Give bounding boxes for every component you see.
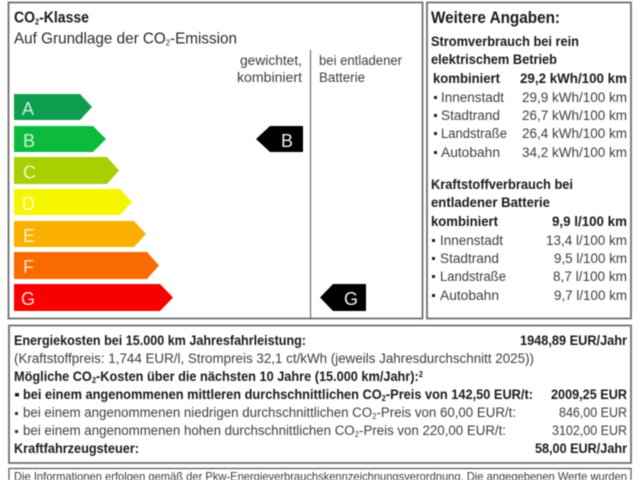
- subheading: 2: [166, 38, 171, 48]
- panel: costs: [9, 326, 631, 463]
- electricity consumption: Landstraße: [441, 126, 507, 141]
- column label: discharged battery: Batterie: [319, 70, 365, 85]
- energy costs: Energiekosten bei 15.000 km Jahresfahrleistung:: [14, 333, 306, 348]
- electricity consumption: Stromverbrauch bei rein: [431, 34, 579, 49]
- electricity consumption: Innenstadt: [441, 90, 504, 105]
- fuel consumption: [431, 177, 627, 303]
- bar D: [14, 189, 132, 215]
- panel: further details: [427, 2, 631, 318]
- possible CO2 costs heading: Mögliche CO: [14, 369, 96, 384]
- fuel consumption: Kraftstoffverbrauch bei: [431, 177, 573, 192]
- electricity consumption: 29,9 kWh/100 km: [522, 90, 627, 105]
- column label: discharged battery: bei entladener: [319, 53, 403, 68]
- vehicle tax: 58,00 EUR/Jahr: [535, 441, 628, 456]
- medium price: [15, 387, 627, 403]
- bar B: B: [23, 131, 35, 151]
- column label: weighted combined: kombiniert: [237, 70, 302, 85]
- fuel consumption: Landstraße: [440, 269, 506, 284]
- possible CO2 costs heading: -Kosten über die nächsten 10 Jahre (15.000 km/Jahr):: [96, 369, 419, 384]
- marker: discharged class G: G: [344, 289, 358, 309]
- bar B: [14, 126, 106, 152]
- low price: -Preis von 60,00 EUR/t:: [377, 405, 516, 420]
- electricity consumption: 34,2 kWh/100 km: [522, 145, 627, 160]
- bar E: [14, 221, 146, 247]
- high price: 2: [355, 430, 360, 439]
- electricity consumption: Autobahn: [441, 145, 500, 160]
- medium price: 2009,25 EUR: [551, 387, 627, 402]
- heading: CO2-Klasse: -Klasse: [39, 10, 89, 26]
- fuel consumption: Stadtrand: [440, 251, 499, 266]
- electricity consumption: elektrischem Betrieb: [431, 52, 557, 67]
- high price: -Preis von 220,00 EUR/t:: [359, 423, 506, 438]
- electricity consumption: kombiniert: [433, 71, 501, 86]
- possible CO2 costs heading: 2: [92, 376, 97, 385]
- electricity consumption: Stadtrand: [441, 108, 500, 123]
- high price: [15, 423, 627, 439]
- energy costs: 1948,89 EUR/Jahr: [520, 333, 628, 348]
- high price: bei einem angenommenen hohen durchschnittlichen CO: [23, 423, 357, 438]
- bar C: [14, 157, 119, 184]
- possible CO2 costs heading: 2: [419, 370, 424, 379]
- low price: bei einem angenommenen niedrigen durchschnittlichen CO: [23, 405, 375, 420]
- marker: weighted class B: B: [281, 131, 293, 151]
- bar C: C: [23, 162, 36, 182]
- bar F: F: [23, 257, 34, 277]
- low price: 2: [372, 412, 377, 421]
- heading: further details: Weitere Angaben:: [431, 9, 560, 27]
- vehicle tax: [14, 441, 628, 456]
- fuel consumption: Innenstadt: [440, 233, 503, 248]
- fuel consumption: 8,7 l/100 km: [553, 269, 627, 284]
- bar A: [14, 94, 92, 120]
- fuel consumption: 9,7 l/100 km: [554, 288, 627, 303]
- fuel and electricity prices: (Kraftstoffpreis: 1,744 EUR/l, Strompreis 32,1 ct/kWh (jeweils Jahresdurchschnitt 2025)): [14, 351, 534, 366]
- subheading: -Emission: [170, 30, 237, 48]
- marker: discharged class G: [320, 284, 366, 311]
- column label: weighted combined: gewichtet,: [240, 53, 302, 68]
- fuel consumption: 9,9 l/100 km: [552, 214, 627, 229]
- fuel consumption: kombiniert: [431, 214, 499, 229]
- medium price: -Preis von 142,50 EUR/t:: [386, 387, 533, 402]
- vehicle tax: Kraftfahrzeugsteuer:: [14, 441, 139, 456]
- low price: 846,00 EUR: [559, 405, 627, 420]
- bar A: A: [22, 99, 34, 119]
- heading: CO2-Klasse: CO: [14, 10, 37, 26]
- bar G: G: [21, 289, 35, 309]
- low price: [15, 405, 627, 421]
- medium price: bei einem angenommenen mittleren durchschnittlichen CO: [23, 387, 399, 402]
- bar G: [14, 284, 173, 311]
- column label: weighted combined: [237, 53, 302, 85]
- bar F: [14, 252, 159, 279]
- fuel consumption: entladener Batterie: [431, 195, 550, 210]
- column label: discharged battery: [319, 53, 403, 85]
- medium price: 2: [382, 394, 386, 403]
- fuel consumption: 9,5 l/100 km: [554, 251, 627, 266]
- electricity consumption: 29,2 kWh/100 km: [520, 71, 627, 86]
- panel: CO2 class: [8, 2, 422, 319]
- heading: CO2-Klasse: 2: [35, 18, 40, 26]
- energy costs: [14, 333, 628, 348]
- subheading: Auf Grundlage der CO: [14, 30, 173, 48]
- panel: footnote: [9, 468, 631, 480]
- marker: weighted class B: [256, 126, 303, 152]
- fuel consumption: Autobahn: [440, 288, 499, 303]
- bar E: E: [23, 226, 35, 246]
- electricity consumption: 26,7 kWh/100 km: [522, 108, 627, 123]
- high price: 3102,00 EUR: [552, 423, 627, 438]
- electricity consumption: [431, 34, 627, 160]
- fuel consumption: 13,4 l/100 km: [546, 233, 627, 248]
- electricity consumption: 26,4 kWh/100 km: [522, 126, 627, 141]
- bar D: D: [22, 194, 35, 214]
